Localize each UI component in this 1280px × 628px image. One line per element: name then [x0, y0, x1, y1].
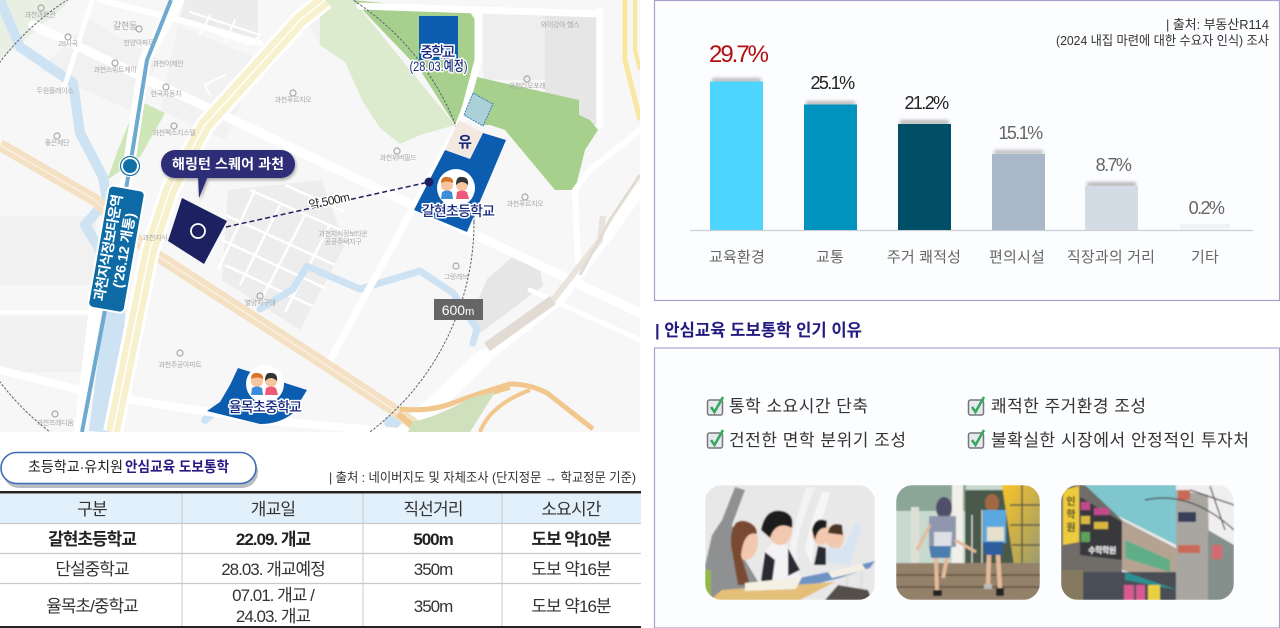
600m badge: 600m	[442, 302, 474, 318]
row: Yulmok: 24.03. 개교	[236, 607, 310, 626]
bar: 기타	[1180, 198, 1230, 266]
photo: academy street: 수학학원	[1088, 545, 1116, 555]
600m badge	[434, 299, 483, 320]
row: Yulmok	[46, 586, 611, 626]
metro line	[82, 0, 171, 432]
photo: students raising hands	[705, 485, 875, 600]
map place labels: 과천푸르지오	[275, 95, 312, 104]
bar: 주거 쾌적성	[887, 93, 961, 266]
kindergarten: 유	[458, 134, 472, 151]
map place labels: 과천지식	[143, 233, 167, 242]
bar: 직장과의 거리: 8.7%	[1096, 155, 1132, 175]
row: Danseol: 도보 약16분	[531, 560, 611, 579]
table title pill: 초등학교·유치원	[28, 459, 123, 476]
reason 1: 통학 소요시간 단축	[729, 397, 868, 416]
school zone pond	[464, 93, 493, 126]
panel: reasons	[654, 348, 1280, 628]
baseline	[690, 230, 1253, 232]
bar: 교통: 25.1%	[810, 73, 855, 93]
table source note: | 출처 : 네이버지도 및 자체조사 (단지정문 → 학교정문 기준)	[329, 470, 636, 485]
river	[0, 0, 477, 432]
map place labels: 과천지식정보타운	[318, 229, 368, 238]
source note: (2024 내집 마련에 대한 수요자 인식) 조사	[1056, 33, 1269, 48]
rail line	[487, 175, 640, 347]
walking distance line: 약 500m	[307, 189, 351, 212]
map place labels: 과천프레디움	[37, 418, 74, 427]
middle school site: (28.03.예정)	[410, 58, 468, 74]
row: Yulmok: 도보 약16분	[531, 597, 611, 616]
icon: station	[119, 155, 141, 177]
row: Galhyeon: 갈현초등학교	[48, 530, 136, 549]
row: Yulmok: 율목초/중학교	[46, 597, 138, 616]
station label	[88, 185, 145, 313]
row: Yulmok: 350m	[414, 597, 453, 616]
icon: children	[441, 177, 469, 199]
reason 3: 건전한 면학 분위기 조성	[729, 431, 906, 450]
section heading: | 안심교육 도보통학 인기 이유	[655, 321, 862, 340]
photo: academy street: 원	[1066, 521, 1076, 534]
bar: 기타: 0.2%	[1189, 198, 1225, 218]
map place labels: 좋은제단	[45, 138, 70, 147]
row: Danseol	[55, 560, 611, 579]
row: Galhyeon: 22.09. 개교	[236, 530, 310, 549]
source note	[1056, 17, 1269, 48]
map place labels: 갈현동	[113, 21, 137, 31]
table header	[77, 500, 602, 519]
table header: 구분	[77, 500, 107, 519]
row: Galhyeon	[48, 530, 611, 549]
school table	[0, 491, 641, 628]
bar: 교육환경: 29.7%	[709, 41, 769, 68]
middle school site	[410, 16, 468, 74]
map place labels: 두원플레이스	[37, 86, 74, 95]
bar: 편의시설: 편의시설	[989, 249, 1045, 266]
map place labels: 과천과학관	[25, 10, 56, 19]
row: Galhyeon: 500m	[413, 530, 454, 549]
bar: 주거 쾌적성: 21.2%	[904, 93, 949, 113]
photo: academy street: 인	[1066, 496, 1076, 508]
map place labels: 과천펙소지스텔	[153, 128, 195, 137]
map place labels: 한국자동차	[151, 89, 182, 98]
table header: 개교일	[251, 500, 295, 519]
map place labels: 한양아파트	[124, 38, 155, 47]
bar: 주거 쾌적성: 주거 쾌적성	[887, 249, 961, 266]
elementary school: Galhyeon: 갈현초등학교	[422, 203, 495, 219]
icon: children	[251, 373, 278, 395]
site marker	[168, 198, 227, 264]
map place labels: 과천푸르지오	[507, 199, 544, 208]
bar: 직장과의 거리	[1067, 155, 1155, 266]
panel: survey bar chart	[654, 0, 1280, 300]
station label: ('26.12 개통)	[109, 212, 138, 289]
orange road	[0, 145, 593, 440]
map place labels: 와이강아 헬스	[541, 20, 580, 29]
photo: academy street: 학	[1066, 508, 1076, 521]
elementary and middle school: Yulmok: 율목초중학교	[229, 399, 302, 415]
table header: 직선거리	[403, 500, 463, 519]
road network	[0, 0, 640, 432]
map place labels: 별양지구대	[245, 298, 275, 307]
residential grid	[218, 180, 345, 330]
bar: 교육환경	[709, 41, 769, 266]
site callout: 해링턴 스퀘어 과천	[172, 156, 284, 172]
map place labels: 과천이제안	[153, 59, 184, 68]
bar: 편의시설	[989, 123, 1045, 266]
bar: 직장과의 거리: 직장과의 거리	[1067, 249, 1155, 266]
row: Yulmok: 07.01. 개교 /	[232, 586, 315, 605]
elementary and middle school: Yulmok	[207, 365, 307, 424]
walking distance line	[226, 178, 434, 227]
map place labels: 그랑레브	[444, 272, 469, 281]
photo: children climbing stairs	[896, 485, 1040, 600]
map place labels: 과천위버필드	[380, 153, 417, 162]
bar: 기타: 기타	[1191, 249, 1219, 266]
row: Danseol: 350m	[414, 560, 453, 579]
reason 2: 쾌적한 주거환경 조성	[991, 397, 1146, 416]
row: Galhyeon: 도보 약10분	[531, 530, 611, 549]
table header: 소요시간	[541, 500, 602, 519]
map place labels: 과천리오포레	[509, 81, 545, 90]
yellow highway	[113, 0, 640, 432]
river along metro	[100, 300, 115, 432]
table title pill: 안심교육 도보통학	[125, 459, 229, 476]
table title pill	[1, 452, 258, 488]
map place labels: 28사곡	[58, 39, 79, 48]
map place labels: 공공주택지구	[325, 237, 362, 246]
map place labels: 과천주공아파트	[159, 360, 202, 369]
middle school site: 중학교	[420, 44, 456, 61]
reason 4: 불확실한 시장에서 안정적인 투자처	[991, 431, 1249, 450]
interchange green	[408, 392, 495, 432]
row: Danseol: 28.03. 개교예정	[221, 560, 325, 579]
elementary school: Galhyeon	[414, 133, 506, 232]
park green	[107, 0, 598, 333]
map place labels: 과천스위트케이	[94, 65, 136, 74]
bar: 교통	[804, 73, 857, 266]
kindergarten	[445, 120, 483, 159]
bar: 편의시설: 15.1%	[998, 123, 1043, 143]
bar: 교통: 교통	[816, 249, 844, 266]
site callout	[161, 150, 295, 198]
600m radius circle	[0, 0, 474, 432]
panel: location map	[0, 0, 640, 432]
photo: academy street	[1061, 485, 1234, 600]
source note: | 출처: 부동산R114	[1166, 17, 1269, 32]
station label: 과천지식정보타운역	[91, 193, 125, 302]
map place labels	[25, 5, 580, 427]
row: Danseol: 단설중학교	[55, 560, 129, 579]
bar: 교육환경: 교육환경	[709, 249, 765, 266]
